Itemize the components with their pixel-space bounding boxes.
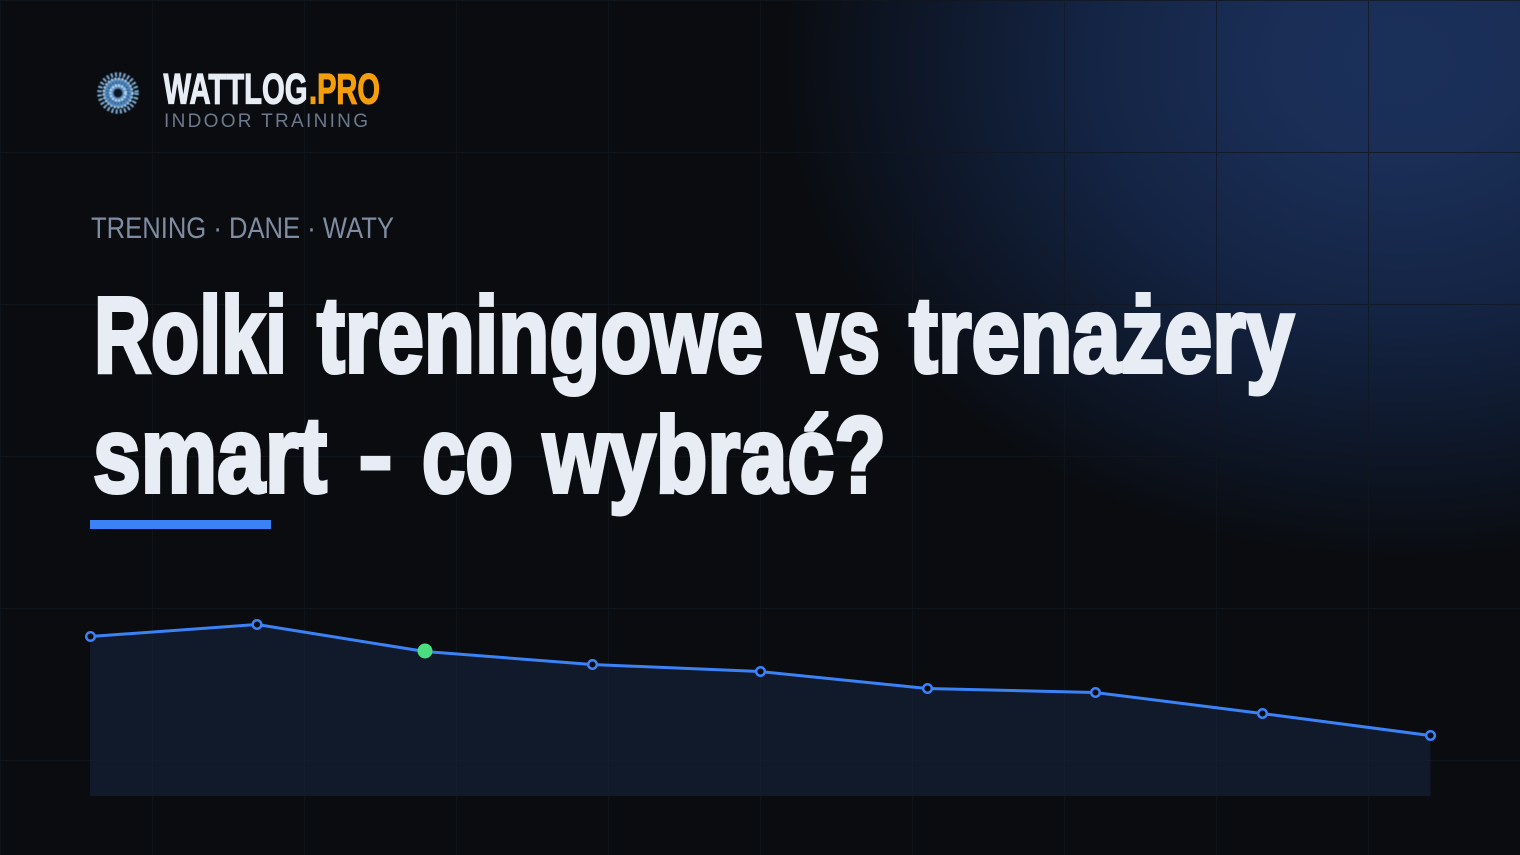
- eyebrow text: TRENING · DANE · WATY: [91, 212, 394, 245]
- title: vs: [797, 274, 880, 395]
- title underline accent: [90, 520, 271, 529]
- line chart: [86, 620, 1435, 796]
- brand name: WATTLOG: [164, 66, 308, 114]
- chart line: [90, 624, 1430, 736]
- title: treningowe: [317, 274, 763, 395]
- highlighted data point: [418, 644, 432, 658]
- title: smart: [93, 394, 327, 515]
- logo: [100, 66, 380, 132]
- title: [93, 274, 1294, 515]
- chart area fill: [90, 624, 1430, 796]
- title: wybrać?: [542, 394, 886, 515]
- icon: cassette gear: [100, 74, 136, 112]
- title: Rolki: [94, 274, 287, 395]
- brand name: .PRO: [309, 66, 380, 114]
- tagline: INDOOR TRAINING: [164, 111, 368, 132]
- title: trenażery: [909, 274, 1294, 395]
- title: co: [422, 394, 513, 515]
- title: –: [360, 394, 391, 515]
- data points: [86, 620, 1435, 740]
